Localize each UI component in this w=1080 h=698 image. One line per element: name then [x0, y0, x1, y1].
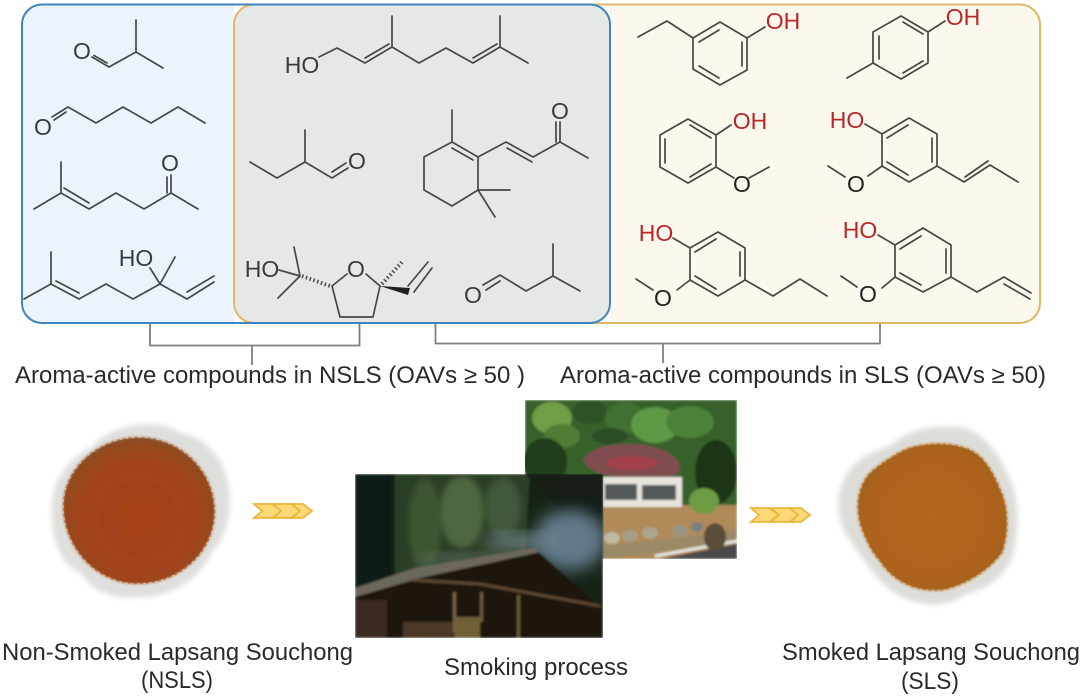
molecule: linalool oxide: HO: [245, 256, 279, 282]
molecule: linalool oxide: O: [347, 256, 365, 282]
molecule: isoeugenol: [828, 107, 1018, 197]
label: non-smoked abbreviation: (NSLS): [141, 667, 213, 694]
molecule: linalool: [24, 245, 214, 299]
tea cup: smoked: [838, 427, 1018, 604]
molecule: geraniol: HO: [285, 52, 319, 78]
molecule: 3-ethylphenol: [638, 8, 800, 85]
molecule: hexanal: [34, 107, 205, 140]
molecules: NSLS only: [24, 20, 214, 299]
tea cup: non-smoked: [52, 424, 230, 598]
molecule: beta-ionone: [424, 98, 588, 217]
molecule: 2-methylpropanal: O: [73, 38, 91, 64]
molecule: linalool oxide: [245, 247, 432, 317]
panel: compound sets (Venn boxes): [22, 4, 1040, 323]
molecule: 4-propylguaiacol: O: [654, 285, 672, 311]
molecule: p-cresol: OH: [946, 4, 980, 30]
molecule: guaiacol: OH: [733, 108, 767, 134]
molecule: guaiacol: [660, 108, 769, 197]
molecule: eugenol: HO: [843, 217, 877, 243]
molecule: isoeugenol: O: [847, 171, 865, 197]
photo: monument in forest: [523, 400, 737, 559]
molecule: eugenol: [841, 217, 1031, 307]
molecule: 3-methylbutanal: [464, 244, 580, 308]
molecule: hexanal: O: [34, 114, 52, 140]
bracket: SLS: [436, 324, 880, 363]
molecule: 2-methylpropanal: [73, 20, 163, 68]
label: SLS compounds: Aroma-active compounds in SLS (OAVs ≥ 50): [560, 362, 1046, 389]
label: smoked abbreviation: (SLS): [901, 668, 959, 695]
molecule: 6-methyl-5-hepten-2-one: [34, 150, 198, 209]
molecule: 6-methyl-5-hepten-2-one: O: [161, 150, 179, 176]
molecule: 3-methylbutanal: O: [464, 282, 482, 308]
molecule: isoeugenol: HO: [830, 107, 864, 133]
label: non-smoked title: Non-Smoked Lapsang Souchong: [2, 639, 353, 666]
molecules: SLS only: [636, 4, 1031, 311]
molecules: shared: [245, 16, 588, 317]
photo: smoking house: [355, 474, 606, 638]
molecule: 4-propylguaiacol: HO: [639, 220, 673, 246]
molecule: 3-ethylphenol: OH: [766, 8, 800, 34]
label: NSLS compounds: Aroma-active compounds in NSLS (OAVs ≥ 50 ): [15, 362, 525, 389]
molecule: 4-propylguaiacol: [636, 220, 827, 311]
bracket: NSLS: [150, 324, 360, 365]
molecule: geraniol: [285, 16, 528, 78]
label: smoking process: Smoking process: [444, 654, 628, 681]
molecule: 2-methylbutanal: O: [348, 148, 366, 174]
label: smoked title: Smoked Lapsang Souchong: [782, 639, 1080, 666]
molecule: eugenol: O: [859, 281, 877, 307]
arrow: chevrons left: [254, 504, 312, 518]
arrow: chevrons right: [751, 508, 810, 522]
molecule: linalool: HO: [119, 245, 153, 271]
molecule: guaiacol: O: [733, 171, 751, 197]
molecule: p-cresol: [847, 4, 980, 79]
molecule: beta-ionone: O: [551, 98, 569, 124]
molecule: 2-methylbutanal: [250, 130, 366, 178]
